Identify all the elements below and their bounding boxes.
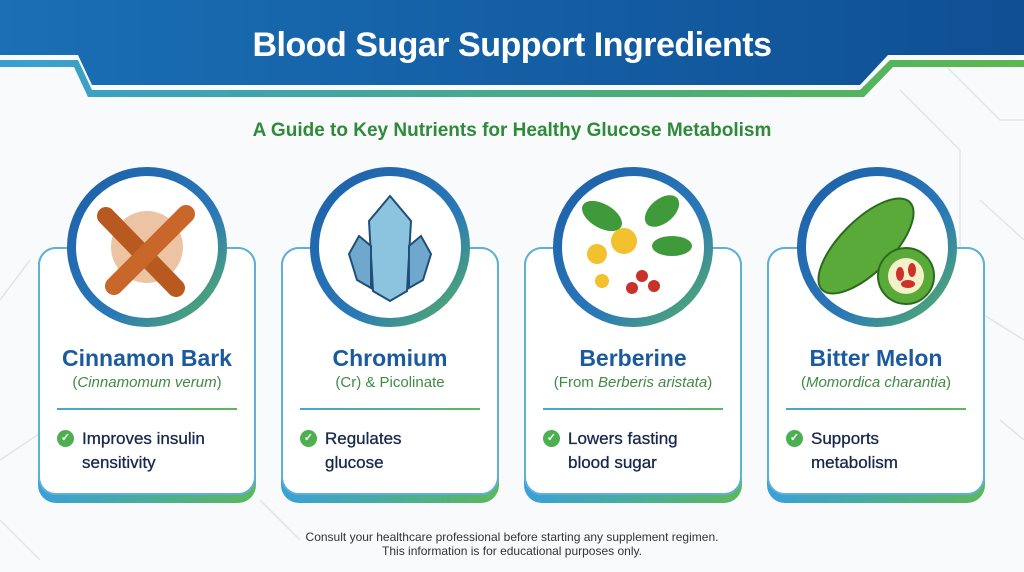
panel: chromium: Regulates — [325, 429, 402, 448]
panel: cinnamon: Cinnamon Bark — [62, 345, 232, 371]
panel: chromium: ✓ — [304, 432, 313, 444]
icon: berberis flowers — [553, 167, 713, 327]
panel: bitter melon: Supports — [811, 429, 879, 448]
footer disclaimer: Consult your healthcare professional before starting any supplement regimen. — [306, 530, 718, 544]
panel: bitter melon — [767, 167, 985, 503]
panel: berberine: Lowers fasting — [568, 429, 678, 448]
panel: cinnamon: ✓ — [61, 432, 70, 444]
footer disclaimer — [306, 530, 718, 558]
panel: bitter melon: Bitter Melon — [810, 345, 942, 371]
panel: chromium: (Cr) & Picolinate — [335, 374, 445, 391]
icon: crystal — [310, 167, 470, 327]
panel: berberine: ✓ — [547, 432, 556, 444]
footer disclaimer: This information is for educational purposes only. — [382, 544, 642, 558]
panel: bitter melon: (Momordica charantia) — [801, 374, 951, 391]
panel: bitter melon: ✓ — [790, 432, 799, 444]
panel: cinnamon: Improves insulin — [82, 429, 205, 448]
icon: bitter melon — [797, 167, 957, 327]
panel: chromium — [281, 167, 499, 503]
header banner — [0, 0, 1024, 97]
panel: berberine: (From Berberis aristata) — [554, 374, 712, 391]
panel: berberine: Berberine — [579, 345, 687, 371]
title: Blood Sugar Support Ingredients — [252, 26, 772, 64]
panel: chromium: Chromium — [332, 345, 448, 371]
panel: chromium: glucose — [325, 453, 384, 472]
panel: cinnamon: sensitivity — [82, 453, 156, 472]
icon: cinnamon — [67, 167, 227, 327]
panel: berberine — [524, 167, 742, 503]
panel: bitter melon: metabolism — [811, 453, 898, 472]
subtitle: A Guide to Key Nutrients for Healthy Glucose Metabolism — [253, 120, 771, 141]
panel: berberine: blood sugar — [568, 453, 657, 472]
panel: cinnamon: (Cinnamomum verum) — [72, 374, 222, 391]
